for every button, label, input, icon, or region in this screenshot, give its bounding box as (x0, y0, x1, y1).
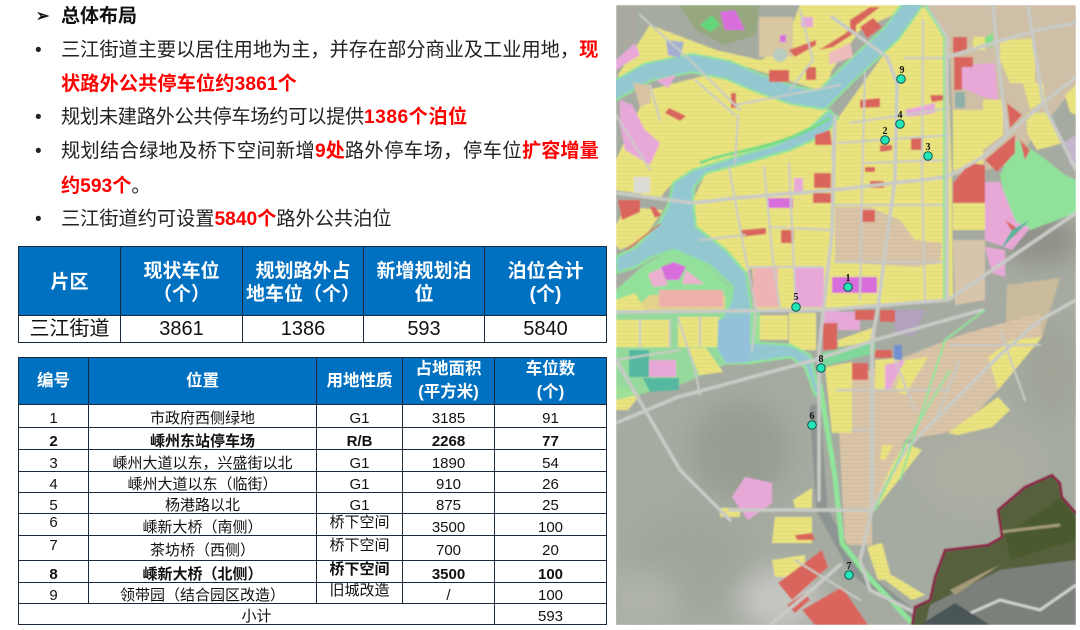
marker 9: 9 (900, 65, 904, 76)
summary table: 新增规划泊 (376, 260, 472, 282)
parking sites table: G1 (349, 454, 370, 472)
parking sites table: 54 (542, 454, 559, 472)
parking sites table: 编号 (37, 372, 70, 390)
parking sites table: 4 (49, 476, 58, 492)
teal and other (629, 15, 1030, 392)
summary table: 593 (407, 318, 441, 340)
green surrounds (616, 312, 760, 400)
parking sites table: 8 (49, 566, 58, 582)
parking sites table: (个) (537, 383, 564, 401)
parking sites table: 小计 (241, 608, 272, 624)
parking sites table: 77 (542, 432, 559, 450)
text block: overall layout: • (35, 40, 42, 61)
magenta (720, 10, 877, 293)
bullet 1: 三江街道主要以居住用地为主，并存在部分商业及工业用地，现 (61, 40, 598, 61)
summary table: 地车位（个） (246, 284, 360, 304)
built-up area inside boundary (912, 475, 1076, 625)
parking sites table: 6 (49, 514, 58, 530)
parking sites table: 5 (49, 497, 58, 514)
text block: overall layout (35, 6, 599, 230)
pink commercial (616, 17, 1030, 520)
parking sites table: 26 (542, 476, 559, 492)
parking sites table (18, 357, 607, 625)
parking sites table: 3185 (432, 410, 465, 427)
marker 8: 8 (818, 354, 824, 365)
marker 7: 7 (846, 561, 852, 572)
marker 6: 6 (810, 411, 814, 422)
parking sites table: 桥下空间 (329, 514, 390, 530)
marker 9 (897, 65, 905, 83)
parking sites table: 用地性质 (326, 372, 392, 390)
marker 2: 2 (882, 126, 888, 137)
crimson boundary (912, 475, 1076, 625)
marker 5 (792, 292, 800, 311)
parking sites table: 1 (49, 410, 58, 427)
parking sites table: 2268 (432, 432, 465, 450)
marker 6 (808, 411, 816, 429)
land use map with parking markers (616, 5, 1076, 625)
summary table: 泊位合计 (507, 260, 584, 282)
parking sites table: 占地面积 (416, 360, 482, 378)
summary table: (个) (530, 284, 561, 304)
map base (600, 5, 1080, 630)
marker 3: 3 (926, 142, 930, 153)
bullet 1 continuation: 状路外公共停车位约3861个 (61, 74, 297, 95)
marker 8 (817, 354, 825, 372)
parking sites table: 位置 (186, 372, 219, 390)
beige planned land (925, 5, 1076, 175)
summary table: 现状车位 (143, 260, 220, 282)
parking sites table: 杨港路以北 (165, 497, 240, 514)
parking sites table: 100 (538, 587, 563, 604)
parking sites table: R/B (347, 432, 372, 450)
text block: overall layout: • (35, 107, 42, 128)
summary table: （个） (153, 284, 210, 304)
text block: overall layout: ➢ (36, 8, 49, 25)
parking sites table: G1 (349, 410, 370, 427)
green park (1000, 140, 1076, 230)
parking sites table: 25 (542, 497, 559, 514)
parking sites table: 车位数 (526, 360, 575, 378)
marker 4 (896, 110, 904, 128)
parking sites table: 嵊州东站停车场 (150, 432, 255, 450)
marker 7 (845, 561, 853, 579)
parking sites table: 3500 (432, 518, 465, 536)
parking sites table: 7 (49, 537, 58, 554)
parking sites table: 700 (436, 542, 461, 559)
parking sites table: 100 (538, 518, 563, 536)
parking sites table: 3 (49, 454, 58, 472)
parking sites table: 3500 (432, 566, 465, 582)
parking sites table: 嵊州大道以东，兴盛街以北 (112, 454, 292, 472)
marker 2 (881, 126, 889, 144)
parking sites table: 910 (436, 476, 461, 492)
beige old city (835, 207, 942, 267)
island (616, 250, 733, 312)
roads (616, 5, 1076, 625)
parking sites table: 领带园（结合园区改造） (120, 587, 285, 604)
parking sites table: 桥下空间 (329, 537, 390, 554)
summary table: 片区 (50, 272, 88, 293)
parking sites table: G1 (349, 476, 370, 492)
marker 1 (844, 273, 852, 291)
marker 3 (924, 142, 932, 160)
parking sites table: 1890 (432, 454, 465, 472)
parking sites table: 市政府西侧绿地 (150, 410, 255, 427)
bullet 3 continuation: 约593个。 (61, 176, 151, 197)
marker 5: 5 (794, 292, 798, 303)
bullet 4: 三江街道约可设置5840个路外公共泊位 (61, 209, 392, 230)
marker 4: 4 (898, 110, 902, 121)
parking sites table: 旧城改造 (329, 582, 390, 599)
parking sites table: 20 (542, 542, 559, 559)
parking markers (792, 65, 932, 579)
summary table: 1386 (281, 318, 325, 340)
parking sites table: G1 (349, 497, 370, 514)
parking sites table: 91 (542, 410, 559, 427)
parking sites table: 9 (49, 587, 58, 604)
parking sites table: 桥下空间 (329, 560, 390, 578)
parking sites table: 嵊新大桥（南侧） (142, 518, 262, 536)
parking sites table: 100 (538, 566, 563, 582)
summary table (18, 246, 607, 343)
tan blocks (633, 83, 651, 107)
parking sites table: 2 (49, 432, 58, 450)
bullet 3: 规划结合绿地及桥下空间新增9处路外停车场，停车位扩容增量 (61, 141, 599, 162)
parking sites table: 593 (538, 608, 563, 624)
parking sites table: (平方米) (418, 383, 479, 401)
parking sites table: 茶坊桥（西侧） (150, 542, 255, 559)
parking sites table: / (446, 587, 451, 604)
summary table: 5840 (523, 318, 568, 340)
marker 1: 1 (846, 273, 850, 284)
heading: 总体布局 (61, 6, 137, 27)
bullet 2: 规划未建路外公共停车场约可以提供1386个泊位 (61, 107, 468, 128)
summary table: 三江街道 (30, 318, 110, 340)
summary table: 规划路外占 (255, 260, 350, 282)
summary table: 3861 (159, 318, 204, 340)
yellow residential (616, 5, 1076, 600)
parking sites table: 嵊州大道以东（临街） (127, 476, 278, 492)
summary table: 位 (414, 284, 434, 304)
parking sites table: 嵊新大桥（北侧） (142, 566, 262, 582)
red (618, 7, 1030, 625)
text block: overall layout: • (35, 209, 42, 230)
text block: overall layout: • (35, 141, 42, 162)
river (612, 5, 912, 623)
parking sites table: 875 (436, 497, 461, 514)
